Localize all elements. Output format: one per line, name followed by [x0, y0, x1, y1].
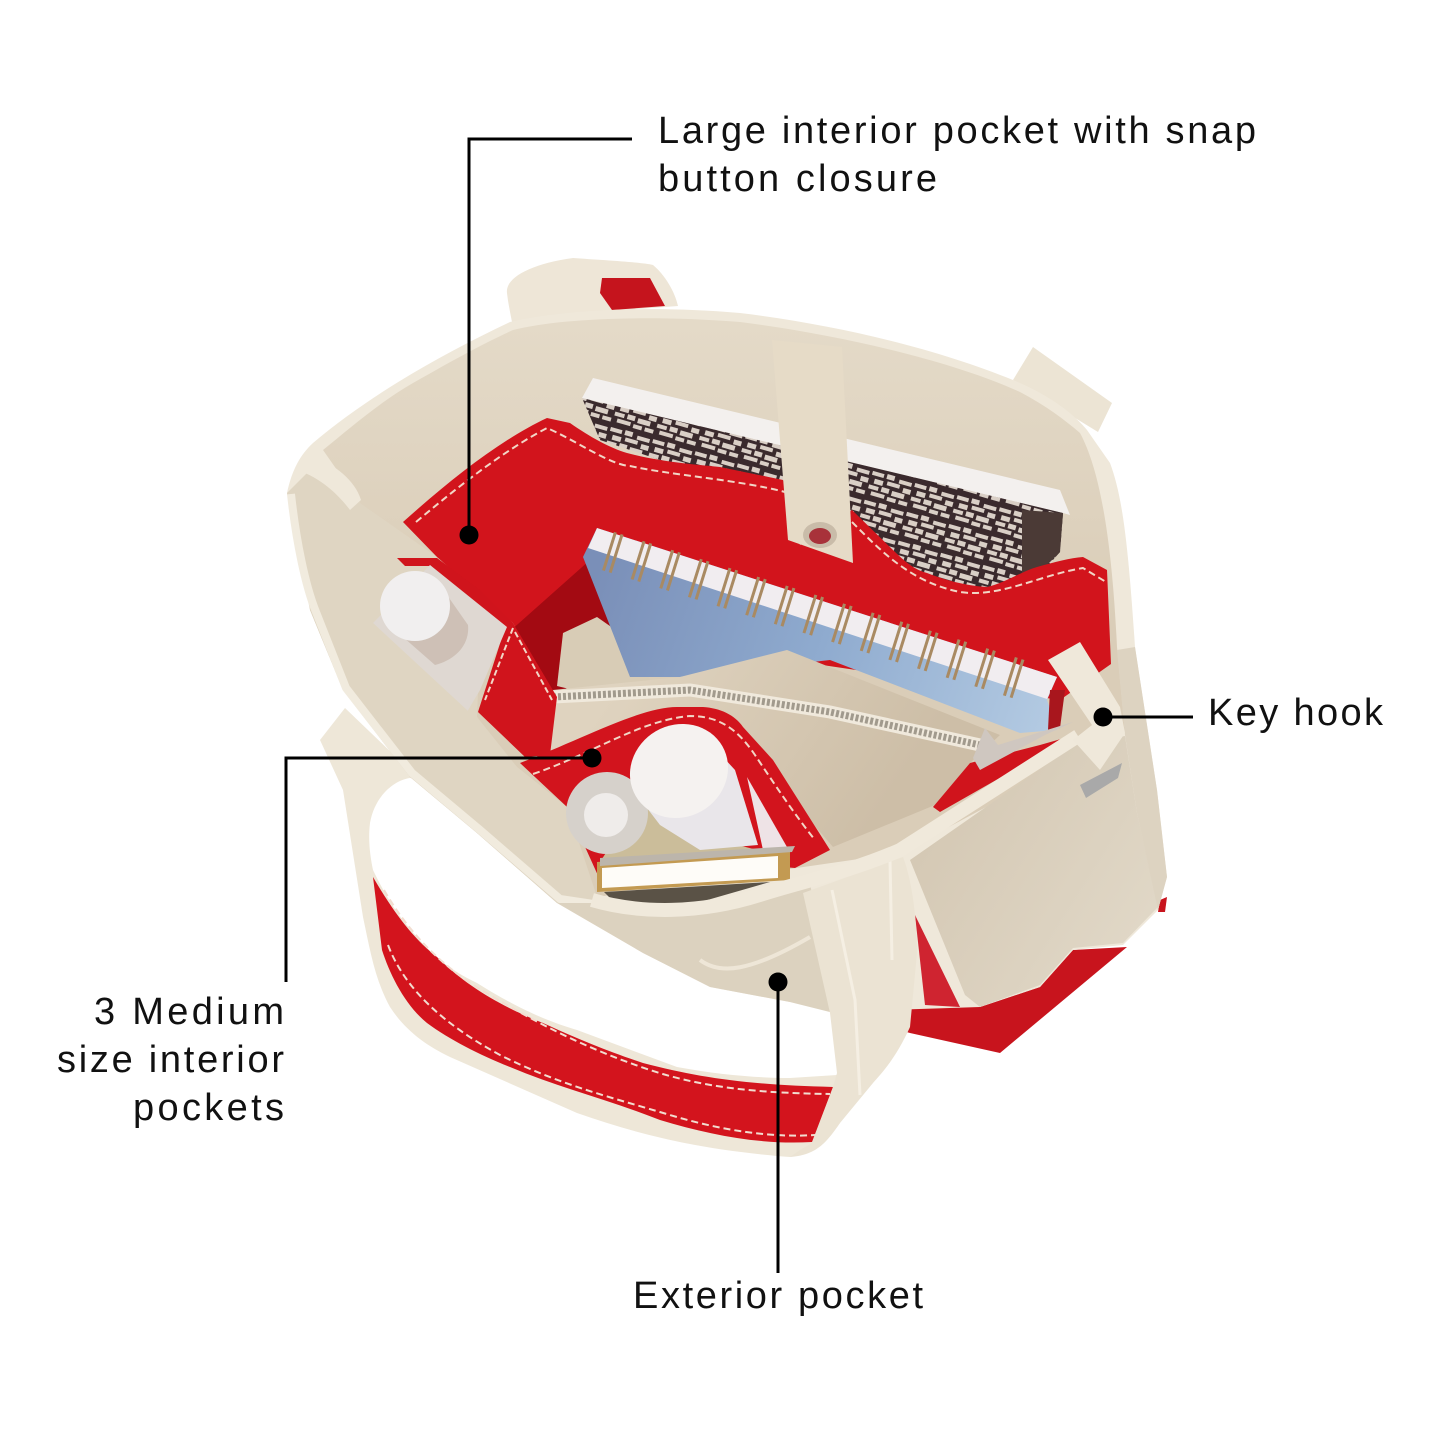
callout: medium interior pockets: pockets	[133, 1087, 284, 1129]
callout: large interior pocket	[460, 110, 1256, 544]
cosmetic box	[597, 846, 795, 905]
callout: large interior pocket: button closure	[658, 158, 937, 200]
composition notebook	[582, 378, 1070, 595]
front rim	[592, 736, 1078, 910]
bag body silhouette	[287, 309, 1167, 1012]
callout: key hook: Key hook	[1208, 692, 1384, 734]
large white bottle	[613, 706, 758, 850]
tote bag illustration	[287, 258, 1167, 1157]
back inner wall	[323, 318, 1125, 897]
shadow behind cosmetics	[600, 800, 770, 862]
callout: exterior pocket: Exterior pocket	[633, 1275, 923, 1317]
key hook strap	[1048, 642, 1125, 798]
spiral notebook	[583, 528, 1065, 733]
back handle	[507, 258, 678, 322]
left side wall	[287, 467, 597, 903]
exterior side pocket	[910, 736, 1158, 1007]
fold knot on rim	[296, 455, 361, 510]
medium red pocket	[520, 707, 830, 880]
callout: medium interior pockets: 3 Medium	[94, 991, 284, 1033]
front strap	[790, 857, 917, 1157]
front handle loop	[320, 708, 840, 1157]
zipper pull and red sliver	[933, 722, 1075, 812]
callout: large interior pocket: Large interior pocket with snap	[658, 110, 1256, 152]
inner cream pouch behind	[557, 617, 650, 705]
callout: exterior pocket	[633, 972, 923, 1317]
large red interior pocket	[403, 418, 1111, 700]
folded card	[747, 777, 787, 850]
callout: medium interior pockets: size interior	[57, 1039, 284, 1081]
side gusset stripes	[915, 915, 960, 1007]
callout: medium interior pockets	[57, 748, 602, 1129]
left rim edge	[291, 494, 600, 905]
front flap of left wall	[310, 610, 597, 903]
left red pocket	[397, 558, 557, 757]
zipper pouch	[550, 650, 1000, 847]
right back handle	[1013, 347, 1112, 432]
red bag base	[817, 897, 1167, 1053]
pocket seam	[700, 937, 810, 969]
bottle in left pocket	[373, 565, 507, 712]
callout: key hook	[1094, 692, 1384, 734]
small spray bottle	[566, 772, 648, 854]
exterior front panel	[557, 882, 830, 1012]
hanging strap with snap button	[772, 340, 853, 563]
right outer strip	[1117, 647, 1167, 910]
